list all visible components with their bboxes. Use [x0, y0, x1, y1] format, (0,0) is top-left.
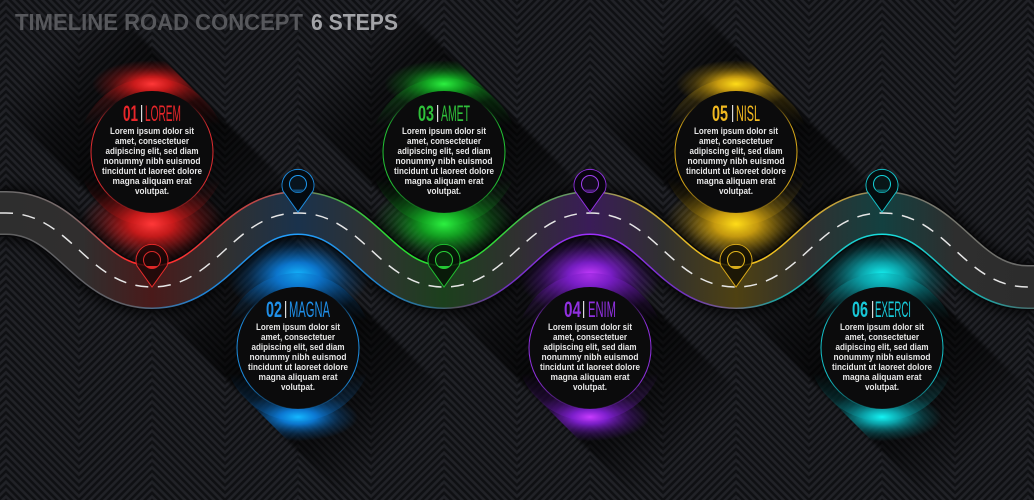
body text 04	[540, 322, 640, 392]
body text 03	[394, 126, 494, 196]
body text 05: volutpat.	[719, 186, 753, 196]
body text 01: Lorem ipsum dolor sit	[110, 126, 194, 136]
heading 02 MAGNA: MAGNA	[289, 297, 330, 322]
pin 3 green	[428, 244, 460, 287]
pin 6 cyan	[866, 169, 898, 212]
panel: step 05: NISL	[736, 101, 760, 126]
body text 04: magna aliquam erat	[550, 372, 630, 382]
body text 01: nonummy nibh euismod	[104, 156, 200, 166]
body text 04: nonummy nibh euismod	[542, 352, 638, 362]
panel: step 02	[237, 287, 359, 409]
heading 01 LOREM	[123, 101, 181, 126]
body text 02: nonummy nibh euismod	[250, 352, 346, 362]
body text 01: amet, consectetuer	[115, 136, 190, 146]
heading 02 MAGNA	[266, 297, 330, 322]
body text 05	[686, 126, 786, 196]
body text 05: magna aliquam erat	[696, 176, 776, 186]
pin 4 purple	[574, 169, 606, 212]
body text 06	[832, 322, 932, 392]
heading 05 NISL	[712, 101, 760, 126]
road centre dashes	[0, 213, 1034, 287]
glows behind the road	[78, 60, 956, 441]
body text 03: adipiscing elit, sed diam	[398, 146, 491, 156]
body text 02: tincidunt ut laoreet dolore	[248, 362, 348, 372]
panel: step 01	[91, 91, 213, 213]
body text 02: magna aliquam erat	[258, 372, 338, 382]
body text 06: volutpat.	[865, 382, 899, 392]
heading 05 NISL: 05	[712, 101, 728, 126]
panel: step 06	[821, 287, 943, 409]
body text 02: Lorem ipsum dolor sit	[256, 322, 340, 332]
body text 03: volutpat.	[427, 186, 461, 196]
panel: step 03	[383, 91, 505, 213]
body text 03: Lorem ipsum dolor sit	[402, 126, 486, 136]
panel: step 05	[675, 91, 797, 213]
heading 03 AMET	[418, 101, 470, 126]
body text 05: nonummy nibh euismod	[688, 156, 784, 166]
pin 1 red	[136, 244, 168, 287]
heading 02 MAGNA: 02	[266, 297, 282, 322]
body text 06: amet, consectetuer	[845, 332, 920, 342]
body text 01	[102, 126, 202, 196]
body text 04: volutpat.	[573, 382, 607, 392]
body text 01: volutpat.	[135, 186, 169, 196]
panel: step 04	[529, 287, 651, 409]
heading 04 ENIM: 04	[564, 297, 582, 322]
heading 04 ENIM: ENIM	[588, 297, 616, 322]
body text 04: tincidunt ut laoreet dolore	[540, 362, 640, 372]
heading 04 ENIM	[564, 297, 616, 322]
body text 02: volutpat.	[281, 382, 315, 392]
body text 05: adipiscing elit, sed diam	[690, 146, 783, 156]
heading 06 EXERCI: 06	[852, 297, 868, 322]
body text 01: magna aliquam erat	[112, 176, 192, 186]
body text 03: nonummy nibh euismod	[396, 156, 492, 166]
body text 02	[248, 322, 348, 392]
panel: step 01: LOREM	[145, 101, 181, 126]
body text 06: Lorem ipsum dolor sit	[840, 322, 924, 332]
body text 02: adipiscing elit, sed diam	[252, 342, 345, 352]
panel: step 03: AMET	[441, 101, 470, 126]
body text 05: amet, consectetuer	[699, 136, 774, 146]
body text 03: amet, consectetuer	[407, 136, 482, 146]
body text 05: Lorem ipsum dolor sit	[694, 126, 778, 136]
road	[0, 213, 1034, 287]
body text 06: magna aliquam erat	[842, 372, 922, 382]
pin 5 yellow	[720, 244, 752, 287]
title: TIMELINE ROAD CONCEPT	[15, 9, 303, 35]
body text 01: tincidunt ut laoreet dolore	[102, 166, 202, 176]
heading 01 LOREM: 01	[123, 101, 138, 126]
body text 04: amet, consectetuer	[553, 332, 628, 342]
heading 03 AMET: 03	[418, 101, 434, 126]
pin 2 blue	[282, 169, 314, 212]
title: 6 STEPS	[311, 9, 398, 35]
body text 03: tincidunt ut laoreet dolore	[394, 166, 494, 176]
body text 06: adipiscing elit, sed diam	[836, 342, 929, 352]
body text 06: nonummy nibh euismod	[834, 352, 930, 362]
heading 06 EXERCI	[852, 297, 911, 322]
body text 02: amet, consectetuer	[261, 332, 336, 342]
body text 06: tincidunt ut laoreet dolore	[832, 362, 932, 372]
body text 03: magna aliquam erat	[404, 176, 484, 186]
body text 01: adipiscing elit, sed diam	[106, 146, 199, 156]
body text 04: Lorem ipsum dolor sit	[548, 322, 632, 332]
body text 04: adipiscing elit, sed diam	[544, 342, 637, 352]
panel: step 06: EXERCI	[875, 297, 911, 322]
body text 05: tincidunt ut laoreet dolore	[686, 166, 786, 176]
